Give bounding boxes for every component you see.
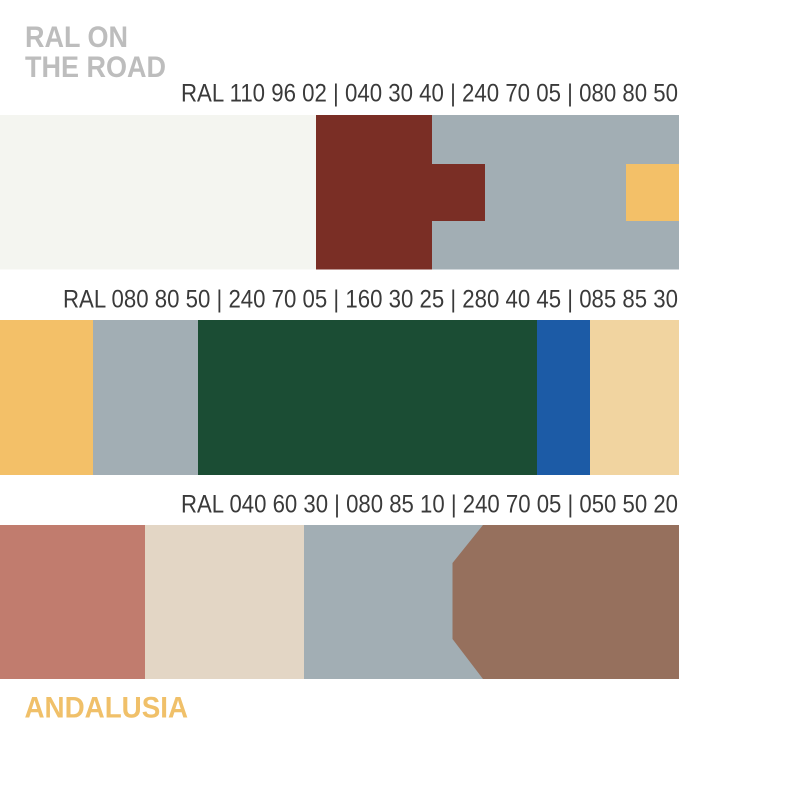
colour codes: row 1: RAL 110 96 02 | 040 30 40 | 240 70 05 | 080 80 50 — [181, 80, 678, 108]
title — [25, 21, 166, 84]
title: RAL ON — [25, 21, 128, 54]
colour band: row 2 — [0, 320, 679, 475]
colour codes: row 2: RAL 080 80 50 | 240 70 05 | 160 30 25 | 280 40 45 | 085 85 30 — [63, 286, 678, 314]
colour codes: row 3: RAL 040 60 30 | 080 85 10 | 240 70 05 | 050 50 20 — [181, 490, 678, 518]
colour band: row 1 — [0, 115, 679, 270]
title: THE ROAD — [25, 51, 166, 84]
region name: ANDALUSIA — [24, 692, 188, 724]
colour band: row 3 — [0, 525, 679, 679]
